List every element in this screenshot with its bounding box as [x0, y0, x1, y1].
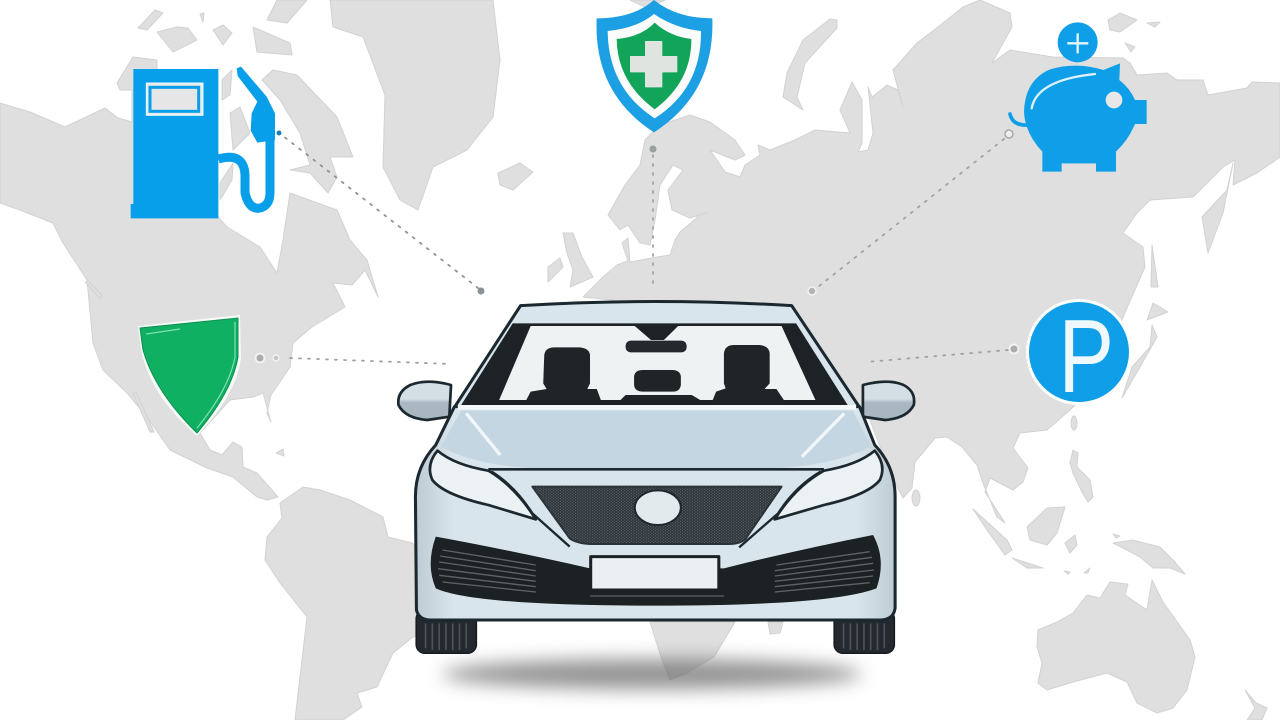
- pump body: [131, 69, 218, 218]
- shield white inset: [608, 14, 701, 118]
- map: Vancouver Island: [85, 281, 102, 299]
- roof: [454, 301, 860, 407]
- icon: piggy bank with coin: [1010, 22, 1147, 172]
- map: Arctic Russian islands: [1108, 13, 1160, 52]
- map: New Guinea: [1113, 540, 1185, 574]
- map: Japan: [1122, 245, 1168, 398]
- rear-view mirror: [626, 341, 687, 352]
- piggy highlight: [1032, 74, 1095, 108]
- left seat: [526, 347, 601, 400]
- map: Sri Lanka: [912, 490, 920, 506]
- lower air intake: [431, 535, 881, 606]
- nozzle: [237, 67, 275, 143]
- icon: parking sign: [1026, 298, 1132, 414]
- hose: [218, 140, 270, 208]
- shield cross: [631, 42, 677, 87]
- map: Sulawesi: [1065, 535, 1077, 553]
- map: Britain: [563, 233, 593, 287]
- left headlight: [430, 451, 536, 519]
- bonnet line: [488, 465, 824, 473]
- map: South America: [265, 487, 440, 720]
- intake slats: [438, 550, 874, 596]
- piggy body: [1024, 63, 1147, 172]
- piggy eye: [1106, 92, 1122, 108]
- map: small Canadian lands: [220, 70, 250, 200]
- pump screen: [147, 83, 203, 115]
- map: Eurasia: [583, 0, 1280, 523]
- windshield glass: [499, 326, 815, 400]
- shield green core: [617, 23, 691, 109]
- map: small islands: [1064, 534, 1120, 574]
- hood: [441, 411, 871, 468]
- icon: blue shield with green cross: [596, 0, 712, 132]
- map: Svalbard: [630, 0, 665, 8]
- map: Iceland: [498, 163, 533, 190]
- map: Australia: [1037, 580, 1195, 713]
- car shadow: [442, 659, 862, 689]
- parking letter: P: [1058, 298, 1114, 414]
- coin: [1058, 22, 1098, 62]
- map: New Zealand: [1245, 690, 1267, 720]
- car body: [415, 407, 895, 620]
- dotted connector: fuel to car: [276, 130, 484, 294]
- dotted connector: insurance to car: [256, 354, 450, 364]
- left tire: [416, 610, 476, 653]
- map: Arctic islands: [117, 0, 307, 90]
- car front view: [398, 301, 914, 653]
- map: Ireland: [548, 258, 563, 282]
- icon: fuel pump: [131, 67, 275, 218]
- map: southern Africa: [650, 622, 735, 680]
- right headlight: [775, 451, 882, 519]
- middle seat: [621, 370, 700, 400]
- windshield: [461, 323, 848, 405]
- map: Sakhalin: [1202, 163, 1233, 253]
- map: North America: [0, 70, 378, 500]
- left mirror: [398, 382, 451, 420]
- map: Baja California: [133, 392, 154, 432]
- map: Novaya Zemlya: [783, 19, 837, 110]
- piggy tail: [1010, 114, 1028, 125]
- grille trim lines: [492, 472, 821, 547]
- map: Philippines: [1070, 450, 1093, 502]
- license plate: [591, 557, 719, 590]
- map: Java: [1012, 558, 1043, 568]
- map: Taiwan: [1071, 416, 1077, 430]
- map: Baffin Island: [262, 70, 353, 193]
- map: Madagascar: [768, 622, 783, 634]
- right seat: [712, 345, 785, 402]
- emblem: [635, 490, 681, 525]
- icon: green shield: [138, 315, 241, 436]
- right mirror: [863, 382, 914, 420]
- grille: [532, 487, 782, 544]
- map: Cuba: [276, 449, 284, 456]
- right tire: [834, 610, 894, 653]
- outer shield: [596, 0, 712, 132]
- dotted connector: parking to car: [866, 344, 1018, 362]
- hood creases: [466, 413, 844, 457]
- dotted connector: health cover to car: [650, 146, 656, 286]
- map: Borneo: [1027, 507, 1065, 545]
- pump screen frame: [150, 87, 199, 111]
- coin plus sign: [1067, 33, 1088, 53]
- hood base line: [458, 400, 856, 414]
- dotted connector: savings to car: [808, 130, 1013, 295]
- map: Sumatra: [973, 509, 1012, 555]
- map: Greenland: [330, 0, 500, 210]
